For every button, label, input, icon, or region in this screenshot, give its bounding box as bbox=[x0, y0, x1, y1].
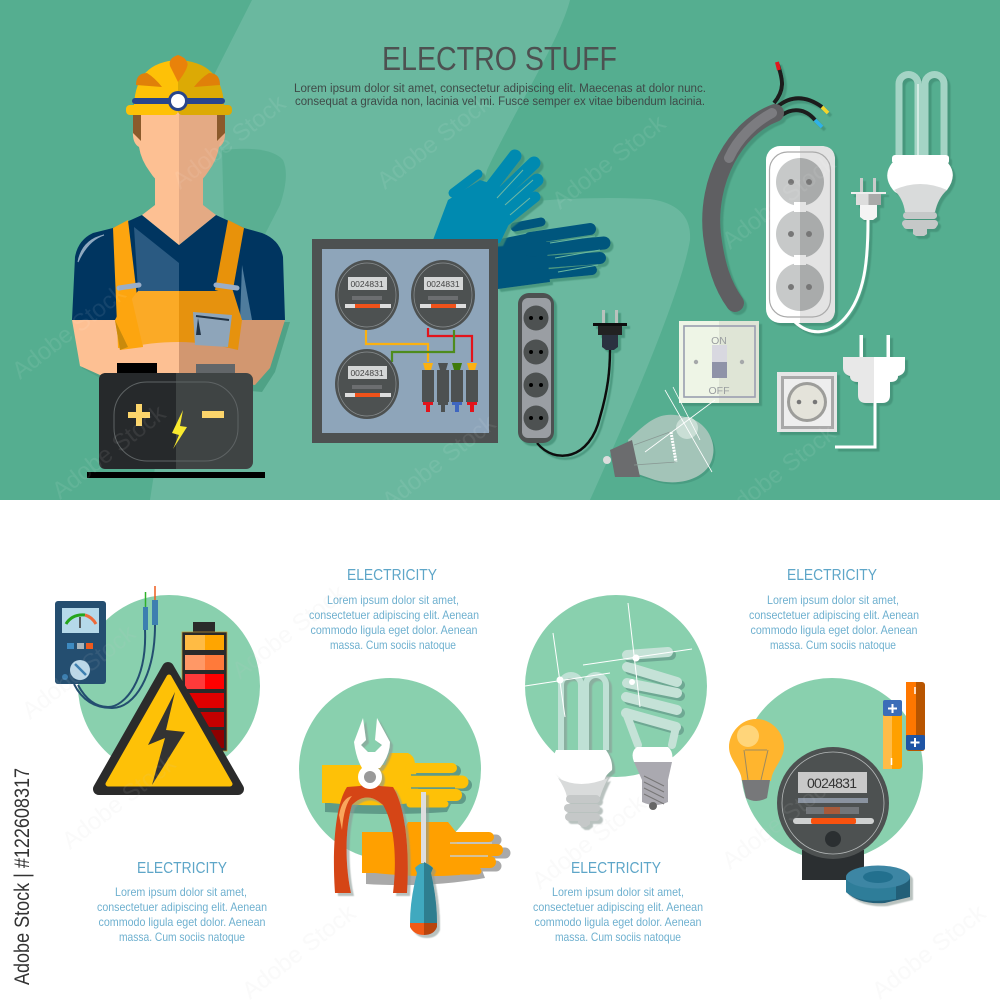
watermark: Adobe Stock bbox=[717, 149, 842, 255]
panel: electric meter box bbox=[312, 239, 498, 443]
text block: electricity bottom middle: consectetuer adipiscing elit. Aenean bbox=[533, 900, 703, 914]
battery bbox=[87, 363, 265, 478]
overalls bbox=[113, 220, 143, 348]
text block: electricity bottom middle bbox=[533, 860, 703, 944]
text block: electricity top right: ELECTRICITY bbox=[787, 567, 877, 584]
fuses bbox=[422, 363, 478, 412]
text block: electricity top right: Lorem ipsum dolor sit amet, bbox=[767, 593, 899, 607]
meter 3 bbox=[335, 349, 399, 419]
tape roll bbox=[846, 866, 910, 903]
icon: meter with bulb, batteries and tape bbox=[729, 678, 925, 903]
text block: electricity top middle: commodo ligula eget dolor. Aenean bbox=[310, 623, 478, 637]
worker figure bbox=[72, 55, 290, 392]
shirt bbox=[72, 215, 285, 320]
watermark: Adobe Stock bbox=[7, 279, 132, 385]
text block: electricity top middle: massa. Cum sociis natoque bbox=[330, 638, 456, 652]
stock credit: Adobe Stock | #122608317 bbox=[11, 768, 34, 985]
watermark on white: Adobe Stock bbox=[17, 619, 142, 725]
bulb bbox=[729, 719, 784, 801]
icon: wall switch bbox=[679, 321, 759, 403]
stand bbox=[802, 850, 864, 880]
meter: 0024831 bbox=[807, 775, 857, 791]
text block: electricity top middle bbox=[309, 567, 479, 652]
watermark: Adobe Stock bbox=[547, 109, 672, 215]
watermark on white: Adobe Stock bbox=[227, 579, 352, 685]
watermark: Adobe Stock bbox=[47, 399, 172, 505]
pliers bbox=[334, 718, 408, 893]
text block: electricity bottom left bbox=[97, 860, 267, 944]
neck and head bbox=[142, 170, 179, 245]
screwdriver bbox=[410, 792, 437, 935]
icon: rubber gloves bbox=[433, 156, 604, 289]
watermark: Adobe Stock bbox=[372, 89, 497, 195]
watermark on white: Adobe Stock bbox=[57, 749, 182, 855]
meter 2 bbox=[411, 260, 475, 330]
icon: wall switch: OFF bbox=[708, 385, 730, 397]
sparkles bbox=[525, 603, 692, 717]
watermark: Adobe Stock bbox=[717, 419, 842, 525]
helmet bbox=[134, 60, 178, 105]
text block: electricity top right: massa. Cum sociis natoque bbox=[770, 638, 896, 652]
wires bbox=[366, 328, 472, 362]
icon: compact fluorescent lamp bbox=[887, 74, 953, 236]
spiral lamp bbox=[626, 652, 680, 810]
upper glove bbox=[433, 156, 537, 246]
text block: electricity bottom middle: massa. Cum sociis natoque bbox=[555, 930, 681, 944]
meter bbox=[777, 747, 889, 859]
watermark bbox=[7, 89, 842, 525]
yellow glove bbox=[322, 753, 466, 814]
watermark on white bbox=[17, 579, 992, 1000]
icon: wall socket bbox=[777, 372, 837, 432]
icon: energy saving lamps bbox=[525, 595, 707, 827]
icon: glass bulb bbox=[603, 387, 715, 484]
text block: electricity bottom left: ELECTRICITY bbox=[137, 860, 227, 877]
intro text: Lorem ipsum dolor sit amet, consectetur adipiscing elit. Maecenas at dolor nunc. bbox=[294, 83, 706, 95]
watermark on white: Adobe Stock bbox=[717, 769, 842, 875]
top banner background bbox=[0, 0, 1000, 500]
battery 1 bbox=[883, 700, 902, 769]
text block: electricity bottom middle: commodo ligula eget dolor. Aenean bbox=[534, 915, 702, 929]
text block: electricity top right: consectetuer adipiscing elit. Aenean bbox=[749, 608, 919, 622]
text block: electricity top right bbox=[749, 567, 919, 652]
text block: electricity top right: commodo ligula eget dolor. Aenean bbox=[750, 623, 918, 637]
intro text bbox=[294, 83, 706, 108]
text block: electricity bottom left: Lorem ipsum dolor sit amet, bbox=[115, 885, 247, 899]
orange glove bbox=[362, 822, 505, 885]
icon: test meter with probes bbox=[55, 586, 260, 777]
icon: warning triangle bbox=[99, 668, 238, 789]
icon: white power strip with plug bbox=[766, 146, 886, 332]
watermark: Adobe Stock bbox=[377, 409, 502, 515]
title: ELECTRO STUFF bbox=[382, 40, 617, 77]
battery 2 bbox=[906, 682, 925, 751]
meter 1: 0024831 bbox=[350, 279, 384, 289]
icon: gloves and pliers bbox=[299, 678, 505, 935]
icon: thick cable with wires bbox=[711, 62, 828, 303]
text block: electricity top middle: Lorem ipsum dolor sit amet, bbox=[327, 593, 459, 607]
icon: white plug bbox=[835, 335, 905, 447]
meter 2: 0024831 bbox=[426, 279, 460, 289]
text block: electricity top middle: ELECTRICITY bbox=[347, 567, 437, 584]
U-tube lamp bbox=[552, 675, 612, 827]
meter 3: 0024831 bbox=[350, 368, 384, 378]
text block: electricity bottom middle: ELECTRICITY bbox=[571, 860, 661, 877]
icon: wall switch: ON bbox=[711, 335, 727, 347]
watermark on white: Adobe Stock bbox=[527, 789, 652, 895]
text block: electricity bottom left: massa. Cum sociis natoque bbox=[119, 930, 245, 944]
lower glove bbox=[470, 222, 604, 289]
text block: electricity top middle: consectetuer adipiscing elit. Aenean bbox=[309, 608, 479, 622]
icon: battery level bbox=[182, 622, 227, 751]
icon: black power strip with plug bbox=[518, 293, 627, 456]
text block: electricity bottom left: commodo ligula eget dolor. Aenean bbox=[98, 915, 266, 929]
intro text: consequat a gravida non, lacinia vel mi. Fusce semper ex vitae bibendum lacinia. bbox=[295, 96, 705, 108]
arms bbox=[72, 320, 179, 375]
watermark: Adobe Stock bbox=[167, 89, 292, 195]
meter 1 bbox=[335, 260, 399, 330]
text block: electricity bottom left: consectetuer adipiscing elit. Aenean bbox=[97, 900, 267, 914]
text block: electricity bottom middle: Lorem ipsum dolor sit amet, bbox=[552, 885, 684, 899]
